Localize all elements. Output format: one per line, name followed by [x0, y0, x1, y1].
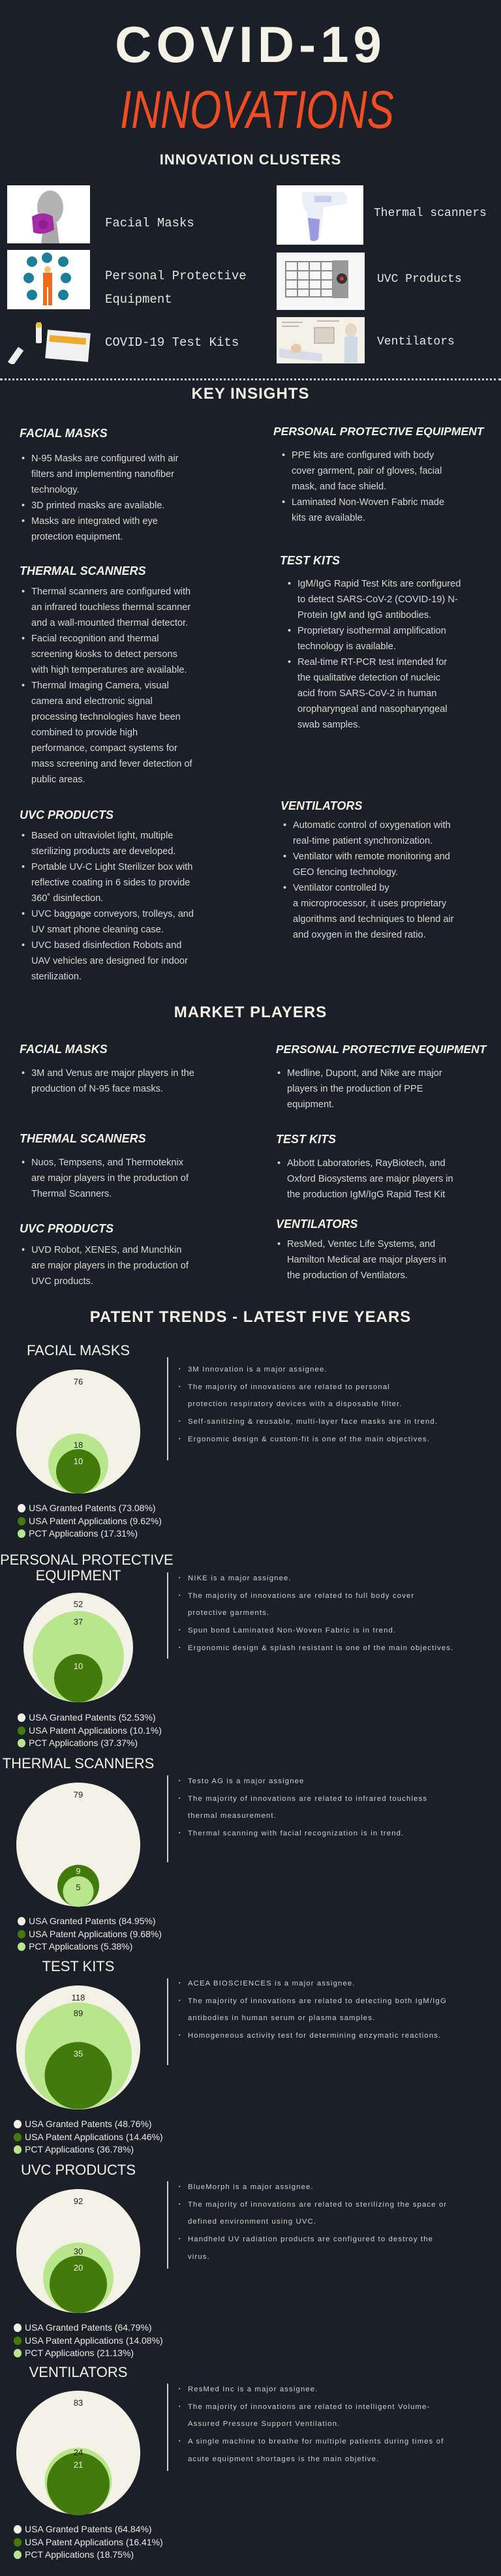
icon: UVC image — [277, 253, 365, 310]
bullets: and oxygen in the desired ratio. — [293, 930, 426, 940]
legend: USA Patent Applications (9.68%) — [29, 1929, 162, 1939]
bullets: are major players in the production of — [31, 1261, 189, 1271]
bullets: ResMed, Ventec Life Systems, and — [287, 1239, 435, 1250]
heading: THERMAL SCANNERS — [20, 1132, 146, 1145]
chart: nested circles: 20 — [74, 2263, 83, 2273]
title: UVC PRODUCTS — [21, 2162, 136, 2178]
chart: nested circles: 79 — [74, 1790, 83, 1800]
icon: ventilator image — [277, 317, 365, 363]
chart: nested circles: 10 — [74, 1661, 83, 1671]
bullets: Hamilton Medical are major players in — [287, 1255, 446, 1265]
heading: UVC PRODUCTS — [20, 808, 114, 821]
bullets: sterilizing products are developed. — [31, 846, 175, 857]
legend: USA Patent Applications (16.41%) — [25, 2537, 163, 2547]
heading: FACIAL MASKS — [20, 1043, 108, 1056]
heading: innovation clusters: INNOVATION CLUSTERS — [160, 151, 341, 168]
bullets: Thermal scanners are configured with — [31, 587, 190, 597]
bullets — [278, 1239, 446, 1281]
bullets: the production of Ventilators. — [287, 1270, 408, 1281]
bullets: acute equipment shortages is the main objetive. — [188, 2455, 379, 2463]
panel: patent UVC products — [0, 2162, 501, 2361]
bullets: Portable UV-C Light Sterilizer box with — [31, 862, 192, 872]
chart: nested circles — [0, 1592, 157, 1704]
bullets: technology. — [31, 485, 80, 495]
bullets — [22, 1068, 194, 1094]
bullets: Ventilator with remote monitoring and — [293, 851, 450, 862]
bullets: sterilization. — [31, 972, 82, 982]
heading: TEST KITS — [280, 554, 340, 567]
panel: key insights thermal scanners — [20, 564, 192, 785]
bullets — [288, 579, 461, 730]
chart: nested circles: 83 — [74, 2398, 83, 2408]
legend: USA Granted Patents (48.76%) — [25, 2119, 152, 2129]
bullets — [179, 2179, 447, 2266]
bullets: camera and electronic signal — [31, 696, 153, 707]
bullets: swab samples. — [297, 720, 361, 730]
bullets: to detect SARS-CoV-2 (COVID-19) N- — [297, 594, 458, 605]
label: Ventilators — [377, 335, 455, 348]
bullets: Oxford Biosystems are major players in — [287, 1174, 453, 1184]
bullets — [179, 1773, 427, 1843]
bullets: real-time patient synchronization. — [293, 836, 433, 846]
bullets — [179, 1361, 438, 1449]
bullets — [22, 587, 192, 785]
label: UVC Products — [377, 273, 462, 286]
chart: nested circles: 21 — [74, 2460, 83, 2470]
panel: market thermal scanners — [20, 1132, 189, 1199]
heading: TEST KITS — [276, 1133, 336, 1146]
icon: PPE image — [7, 250, 90, 309]
heading: UVC PRODUCTS — [20, 1222, 114, 1235]
label — [105, 269, 247, 307]
bullets: NIKE is a major assignee. — [188, 1574, 292, 1582]
chart: nested circles: 92 — [74, 2196, 83, 2206]
bullets: Thermal Scanners. — [31, 1189, 112, 1199]
bullets: UV smart phone cleaning case. — [31, 925, 164, 935]
bullets: Self-sanitizing & reusable, multi-layer face masks are in trend. — [188, 1418, 438, 1426]
bullets — [22, 453, 179, 542]
bullets: Laminated Non-Woven Fabric made — [292, 497, 444, 508]
bullets: Facial recognition and thermal — [31, 634, 159, 644]
legend: USA Granted Patents (64.79%) — [25, 2322, 152, 2333]
bullets: an infrared touchless thermal scanner — [31, 602, 190, 613]
icon: mask image — [7, 185, 90, 243]
legend — [13, 2118, 163, 2156]
bullets: production of N-95 face masks. — [31, 1084, 163, 1094]
bullets: The majority of innovations are related to intelligent Volume- — [188, 2403, 430, 2411]
bullets: combined to provide high — [31, 728, 138, 738]
panel: patent thermal scanners — [0, 1755, 501, 1954]
bullets: Assured Pressure Support Ventilation. — [188, 2420, 340, 2428]
bullets: The majority of innovations are related to detecting both IgM/IgG — [188, 1997, 447, 2005]
chart: nested circles: 52 — [74, 1599, 83, 1609]
bullets: Testo AG is a major assignee — [188, 1777, 305, 1785]
bullets: processing technologies have been — [31, 712, 181, 722]
panel: key insights UVC products — [20, 808, 194, 982]
legend: PCT Applications (18.75%) — [25, 2549, 134, 2560]
bullets: PPE kits are configured with body — [292, 450, 434, 461]
bullets: Ergonomic design & splash resistant is one of the main objectives. — [188, 1644, 453, 1652]
bullets — [179, 1570, 453, 1657]
bullets: and a wall-mounted thermal detector. — [31, 618, 188, 628]
panel: key insights test kits — [280, 554, 461, 730]
heading: market players: MARKET PLAYERS — [174, 1004, 327, 1021]
bullets — [278, 1158, 453, 1200]
bullets: technology is available. — [297, 641, 396, 652]
heading: VENTILATORS — [276, 1218, 357, 1231]
bullets: are major players in the production of — [31, 1173, 189, 1184]
bullets: Abbott Laboratories, RayBiotech, and — [287, 1158, 446, 1169]
bullets: the qualitative detection of nucleic — [297, 673, 440, 683]
bullets: Medline, Dupont, and Nike are major — [287, 1068, 442, 1079]
cluster: thermal scanners — [277, 185, 487, 245]
heading: PERSONAL PROTECTIVE EQUIPMENT — [273, 425, 484, 438]
chart: nested circles: 76 — [74, 1377, 83, 1387]
panel: patent facial masks — [16, 1342, 438, 1539]
bullets: UVC products. — [31, 1276, 93, 1287]
bullets: defined environment using UVC. — [188, 2218, 316, 2226]
chart: nested circles: 37 — [74, 1617, 83, 1627]
legend: USA Patent Applications (14.46%) — [25, 2131, 163, 2141]
bullets: The majority of innovations are related to personal — [188, 1383, 390, 1391]
panel: market test kits — [276, 1133, 453, 1200]
bullets: thermal measurement. — [188, 1812, 277, 1820]
title: EQUIPMENT — [36, 1567, 121, 1584]
icon: test kit image — [8, 322, 91, 364]
icon: thermal scanner image — [277, 185, 363, 245]
bullets: UVC baggage conveyors, trolleys, and — [31, 909, 194, 919]
heading: patent trends: PATENT TRENDS - LATEST FIVE YEARS — [90, 1308, 411, 1326]
bullets: players in the production of PPE — [287, 1084, 423, 1094]
legend: PCT Applications (17.31%) — [29, 1528, 138, 1539]
panel: patent PPE — [0, 1552, 501, 1751]
bullets: Ergonomic design & custom-fit is one of the main objectives. — [188, 1435, 430, 1443]
bullets: N-95 Masks are configured with air — [31, 453, 178, 464]
chart: nested circles — [16, 1370, 140, 1494]
title — [0, 1552, 157, 1584]
legend: USA Patent Applications (14.08%) — [25, 2335, 163, 2345]
legend — [17, 1711, 162, 1750]
bullets: A single machine to breathe for multiple patients during times of — [188, 2438, 444, 2446]
panel: market PPE — [276, 1043, 487, 1110]
heading: VENTILATORS — [281, 799, 362, 812]
bullets — [22, 1158, 189, 1199]
bullets: Real-time RT-PCR test intended for — [297, 657, 447, 667]
chart: nested circles: 89 — [74, 2008, 83, 2018]
bullets: 3M Innovation is a major assignee. — [188, 1366, 327, 1373]
bullets: kits are available. — [292, 513, 365, 523]
bullets: algorithms and techniques to blend air — [293, 914, 454, 925]
bullets: ACEA BIOSCIENCES is a major assignee. — [188, 1980, 356, 1987]
bullets: reflective coating in 6 sides to provide — [31, 878, 190, 888]
bullets: the production IgM/IgG Rapid Test Kit — [287, 1189, 445, 1200]
panel: key insights ventilators — [281, 799, 454, 940]
bullets: 360˚ disinfection. — [31, 893, 103, 904]
chart: nested circles: 30 — [74, 2246, 83, 2256]
chart: nested circles: 24 — [74, 2447, 83, 2457]
chart: nested circles: 18 — [74, 1440, 83, 1450]
bullets: UVD Robot, XENES, and Munchkin — [31, 1245, 181, 1255]
cluster: facial masks — [7, 185, 194, 243]
chart: nested circles — [0, 2391, 157, 2516]
legend: PCT Applications (5.38%) — [29, 1941, 132, 1952]
legend: USA Granted Patents (73.08%) — [29, 1503, 156, 1513]
bullets: performance, compact systems for — [31, 743, 177, 754]
bullets: oropharyngeal and nasopharyngeal — [297, 704, 448, 714]
bullets: Protein IgM and IgG antibodies. — [297, 610, 431, 621]
bullets: protection respiratory devices with a disposable filter. — [188, 1400, 402, 1408]
bullets: UAV vehicles are designed for indoor — [31, 956, 188, 966]
bullets: screening kiosks to detect persons — [31, 649, 177, 660]
bullets: The majority of innovations are related to sterilizing the space or — [188, 2201, 447, 2209]
bullets: 3D printed masks are available. — [31, 500, 164, 511]
bullets — [282, 450, 444, 523]
legend — [17, 1502, 162, 1540]
chart: nested circles: 118 — [72, 1993, 85, 2002]
legend: USA Patent Applications (10.1%) — [29, 1725, 162, 1736]
bullets: Thermal scanning with facial recognization is in trend. — [188, 1830, 404, 1837]
bullets: Nuos, Tempsens, and Thermoteknix — [31, 1158, 183, 1168]
label: Equipment — [105, 292, 172, 307]
label: COVID-19 Test Kits — [105, 335, 239, 350]
panel: key insights facial masks — [20, 427, 179, 542]
heading: PERSONAL PROTECTIVE EQUIPMENT — [276, 1043, 487, 1056]
bullets: protection equipment. — [31, 532, 123, 542]
bullets — [179, 1975, 447, 2045]
panel: patent ventilators — [0, 2365, 501, 2564]
panel: market UVC products — [20, 1222, 189, 1287]
bullets: Spun bond Laminated Non-Woven Fabric is in trend. — [188, 1627, 396, 1634]
heading: key insights: KEY INSIGHTS — [192, 385, 309, 403]
bullets — [22, 1245, 189, 1287]
legend: PCT Applications (37.37%) — [29, 1738, 138, 1748]
panel: market facial masks — [20, 1043, 194, 1094]
label: Thermal scanners — [374, 207, 487, 220]
panel: patent test kits — [0, 1959, 501, 2158]
title: THERMAL SCANNERS — [3, 1755, 154, 1771]
bullets: Ventilator controlled by — [293, 883, 389, 893]
bullets: equipment. — [287, 1099, 334, 1110]
bullets: antibodies in human serum or plasma samples. — [188, 2014, 375, 2022]
bullets — [278, 1068, 442, 1110]
chart: nested circles — [0, 1982, 157, 2113]
bullets: mask, and face shield. — [292, 482, 386, 492]
chart: nested circles — [0, 2189, 157, 2320]
bullets: Proprietary isothermal amplification — [297, 626, 446, 636]
title: FACIAL MASKS — [27, 1342, 130, 1358]
bullets — [179, 2381, 444, 2468]
legend: USA Patent Applications (9.62%) — [29, 1515, 162, 1526]
cluster: ventilators — [277, 317, 455, 363]
bullets: The majority of innovations are related to infrared touchless — [188, 1795, 427, 1803]
title: PERSONAL PROTECTIVE — [0, 1552, 174, 1568]
chart: nested circles: 35 — [74, 2049, 83, 2059]
bullets: acid from SARS-CoV-2 in human — [297, 688, 436, 699]
bullets: The majority of innovations are related to full body cover — [188, 1592, 414, 1600]
title: COVID-19: COVID-19 — [115, 16, 386, 73]
bullets: cover garment, pair of gloves, facial — [292, 466, 442, 476]
panel: market ventilators — [276, 1218, 446, 1281]
chart: nested circles: 10 — [74, 1456, 83, 1466]
title: VENTILATORS — [29, 2364, 127, 2380]
bullets: a microprocessor, it uses proprietary — [293, 898, 446, 909]
bullets: UVC based disinfection Robots and — [31, 940, 181, 951]
legend — [17, 1915, 162, 1954]
panel: key insights PPE — [273, 425, 485, 523]
label: Personal Protective — [105, 269, 247, 283]
bullets: IgM/IgG Rapid Test Kits are configured — [297, 579, 461, 589]
bullets: GEO fencing technology. — [293, 867, 398, 878]
bullets: Automatic control of oxygenation with — [293, 820, 451, 831]
bullets: Homogeneous activity test for determining enzymatic reactions. — [188, 2032, 441, 2040]
heading: THERMAL SCANNERS — [20, 564, 146, 577]
legend: USA Granted Patents (52.53%) — [29, 1712, 156, 1723]
legend — [13, 2523, 163, 2562]
legend: PCT Applications (36.78%) — [25, 2144, 134, 2154]
label: Facial Masks — [105, 216, 194, 230]
bullets: mass screening and fever detection of — [31, 759, 192, 769]
chart: nested circles — [0, 1779, 157, 1910]
cluster: PPE — [7, 250, 247, 309]
bullets: BlueMorph is a major assignee. — [188, 2183, 314, 2191]
bullets: virus. — [188, 2253, 210, 2261]
bullets: ResMed Inc is a major assignee. — [188, 2385, 318, 2393]
legend — [13, 2322, 163, 2359]
bullets: Masks are integrated with eye — [31, 516, 158, 527]
bullets: public areas. — [31, 774, 85, 785]
bullets: with high temperatures are available. — [31, 665, 187, 675]
bullets — [22, 831, 194, 982]
cluster: UVC products — [277, 253, 462, 310]
bullets: Thermal Imaging Camera, visual — [31, 681, 169, 691]
cluster: test kits — [8, 322, 239, 364]
chart: nested circles: 5 — [76, 1882, 81, 1892]
chart: nested circles: 9 — [76, 1866, 81, 1876]
legend: PCT Applications (21.13%) — [25, 2348, 134, 2358]
title: TEST KITS — [42, 1958, 114, 1974]
bullets: Handheld UV radiation products are configured to destroy the — [188, 2235, 433, 2243]
bullets: Based on ultraviolet light, multiple — [31, 831, 173, 841]
legend: USA Granted Patents (84.95%) — [29, 1916, 156, 1926]
legend: USA Granted Patents (64.84%) — [25, 2524, 152, 2534]
bullets: protective garments. — [188, 1609, 269, 1617]
bullets — [283, 820, 454, 940]
heading: FACIAL MASKS — [20, 427, 108, 440]
bullets: 3M and Venus are major players in the — [31, 1068, 194, 1079]
bullets: filters and implementing nanofiber — [31, 469, 174, 480]
